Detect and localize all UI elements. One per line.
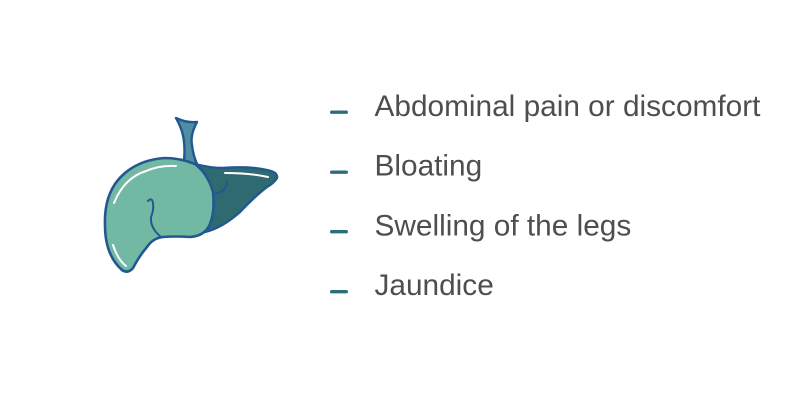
- label: Bloating: [374, 150, 482, 182]
- liver: vessel: [176, 118, 197, 164]
- label: Abdominal pain or discomfort: [374, 90, 761, 123]
- dash: [330, 110, 348, 114]
- list item: jaundice: [330, 269, 494, 302]
- label: Swelling of the legs: [374, 210, 631, 242]
- label: Jaundice: [374, 269, 494, 302]
- dash: [330, 230, 348, 233]
- list item: abdominal pain: [330, 90, 761, 123]
- liver: left light lobe: [105, 158, 214, 272]
- liver: inner fissure lines: [148, 182, 227, 237]
- liver: highlights: [113, 166, 268, 266]
- liver: right dark lobe: [190, 164, 277, 232]
- list item: bloating: [330, 150, 482, 182]
- icon: liver: [105, 118, 277, 272]
- dash: [330, 170, 348, 174]
- list item: swelling: [330, 210, 631, 242]
- dash: [330, 290, 348, 293]
